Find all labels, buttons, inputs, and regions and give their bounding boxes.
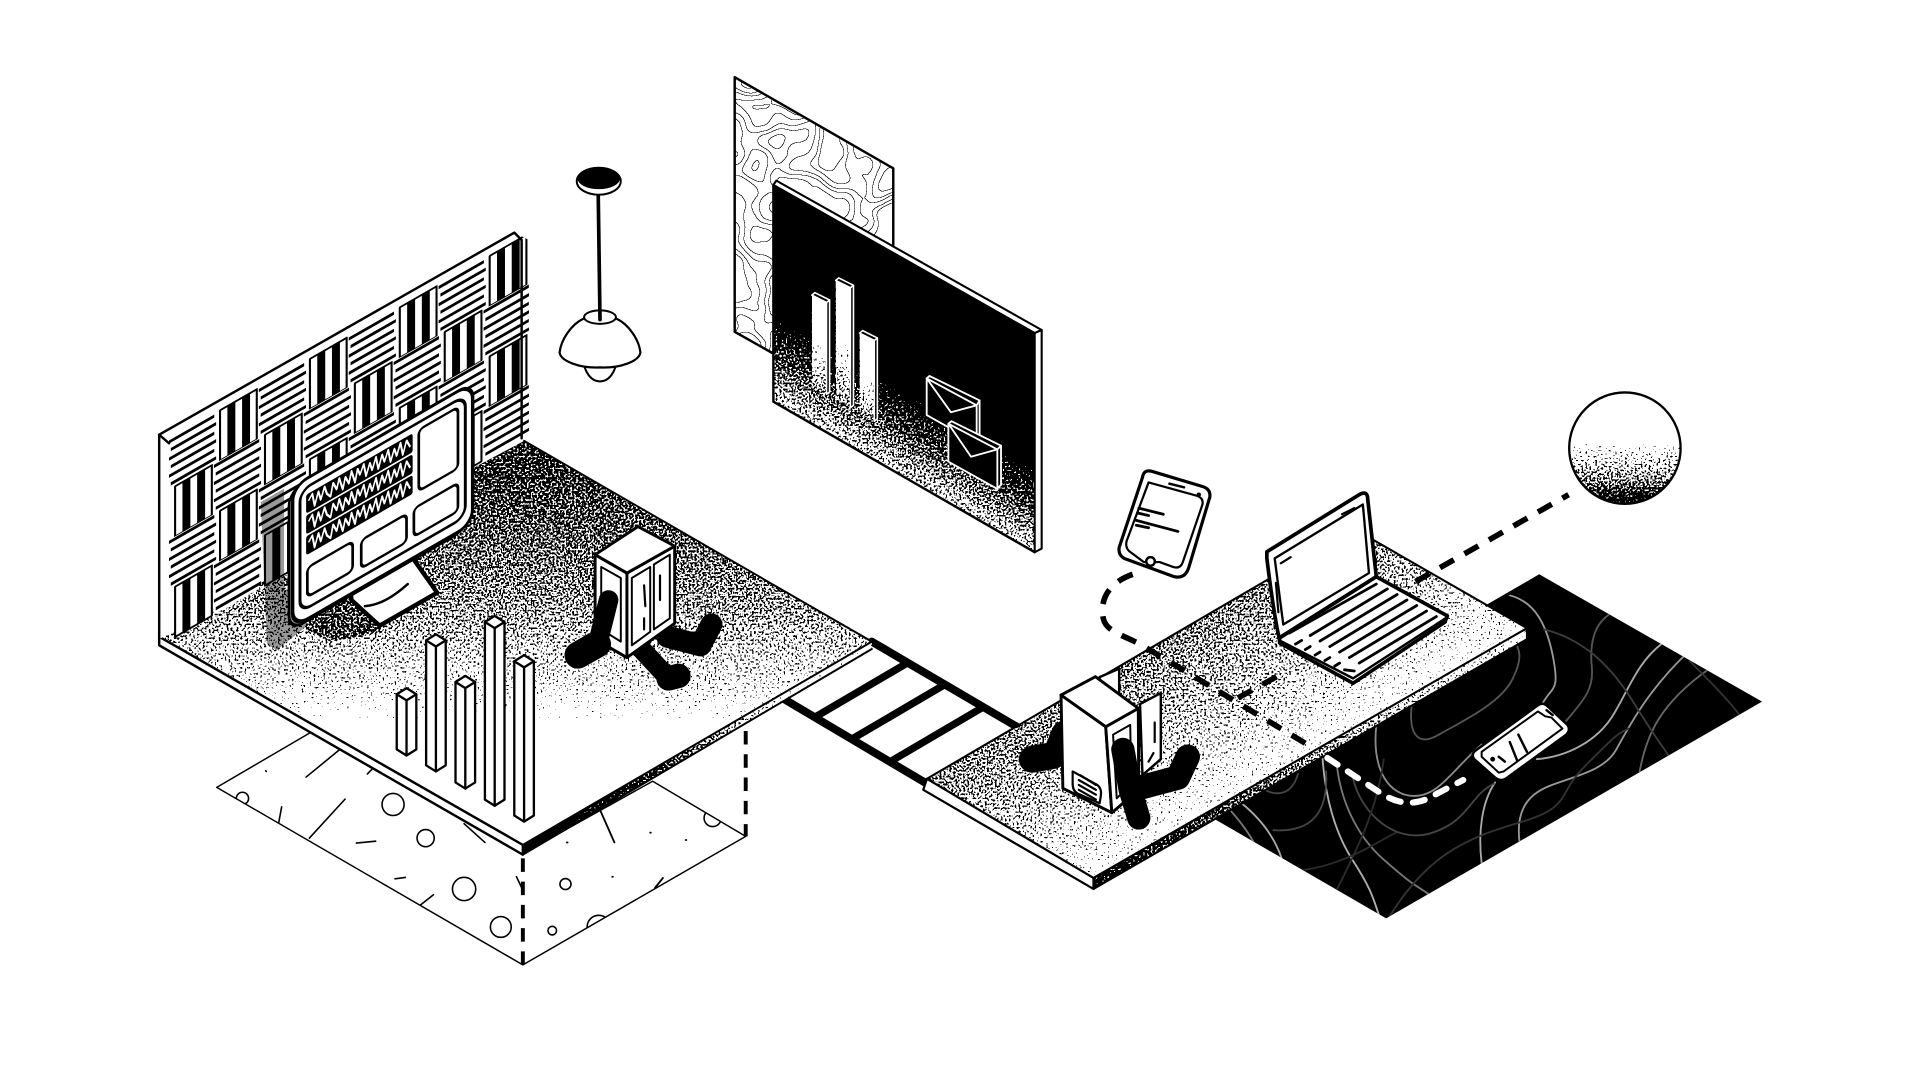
right character with box body	[1032, 669, 1188, 818]
black topographic ground	[1200, 574, 1762, 918]
dashed line to sphere	[1416, 495, 1569, 582]
floor front left side	[159, 637, 523, 855]
platform left side	[923, 779, 1093, 889]
dashed path on black ground	[1327, 758, 1463, 803]
vent	[1073, 771, 1101, 803]
foundation block under left floor	[217, 732, 746, 965]
floating tablet	[1119, 471, 1210, 577]
lamp bulb	[583, 358, 617, 381]
dashed path tablet to ground	[1102, 574, 1311, 747]
platform right side	[1093, 628, 1527, 889]
board envelopes	[927, 376, 1001, 489]
back legs	[667, 624, 711, 645]
box body	[1061, 677, 1139, 813]
floor front right side	[523, 642, 872, 855]
lamp shade	[560, 318, 640, 367]
lamp rod	[598, 190, 600, 320]
right platform	[923, 529, 1527, 889]
foundation left face texture	[236, 749, 523, 937]
lamp	[560, 167, 640, 381]
pillar bars on floor	[397, 616, 534, 822]
foundation right face texture	[548, 809, 721, 939]
front leg	[1123, 749, 1139, 818]
dashed corner lines of foundation	[523, 731, 746, 965]
tablet text lines	[1136, 508, 1178, 531]
wall tiles	[169, 232, 531, 640]
floor top stipple	[159, 441, 872, 845]
laptop base	[1280, 577, 1447, 683]
monitor chart rows	[306, 433, 413, 555]
box body	[595, 527, 675, 658]
left character with box body	[578, 527, 711, 678]
acoustic tile wall	[159, 232, 531, 640]
black chart board	[773, 181, 1042, 552]
board rims	[773, 181, 1042, 333]
left floor platform	[159, 441, 872, 855]
laptop screen	[1267, 493, 1376, 638]
monitor shadow	[261, 489, 382, 650]
isometric illustration	[158, 76, 1762, 966]
monitor	[289, 383, 473, 631]
monitor stand	[349, 551, 437, 626]
board bar chart	[812, 278, 877, 421]
bridge ladder	[780, 642, 1020, 784]
dashed branch to laptop	[1238, 671, 1287, 698]
monitor panels	[307, 407, 458, 599]
back leg	[1053, 732, 1063, 756]
topographic wall panel	[735, 77, 893, 355]
laptop	[1267, 493, 1447, 683]
laptop keyboard lines	[1289, 584, 1436, 671]
phone on ground	[1473, 704, 1569, 780]
back door panels	[1100, 669, 1161, 775]
ground contour lines	[1231, 594, 1739, 918]
sphere	[1569, 392, 1681, 504]
front leg	[598, 600, 609, 644]
lamp canopy	[577, 168, 621, 195]
